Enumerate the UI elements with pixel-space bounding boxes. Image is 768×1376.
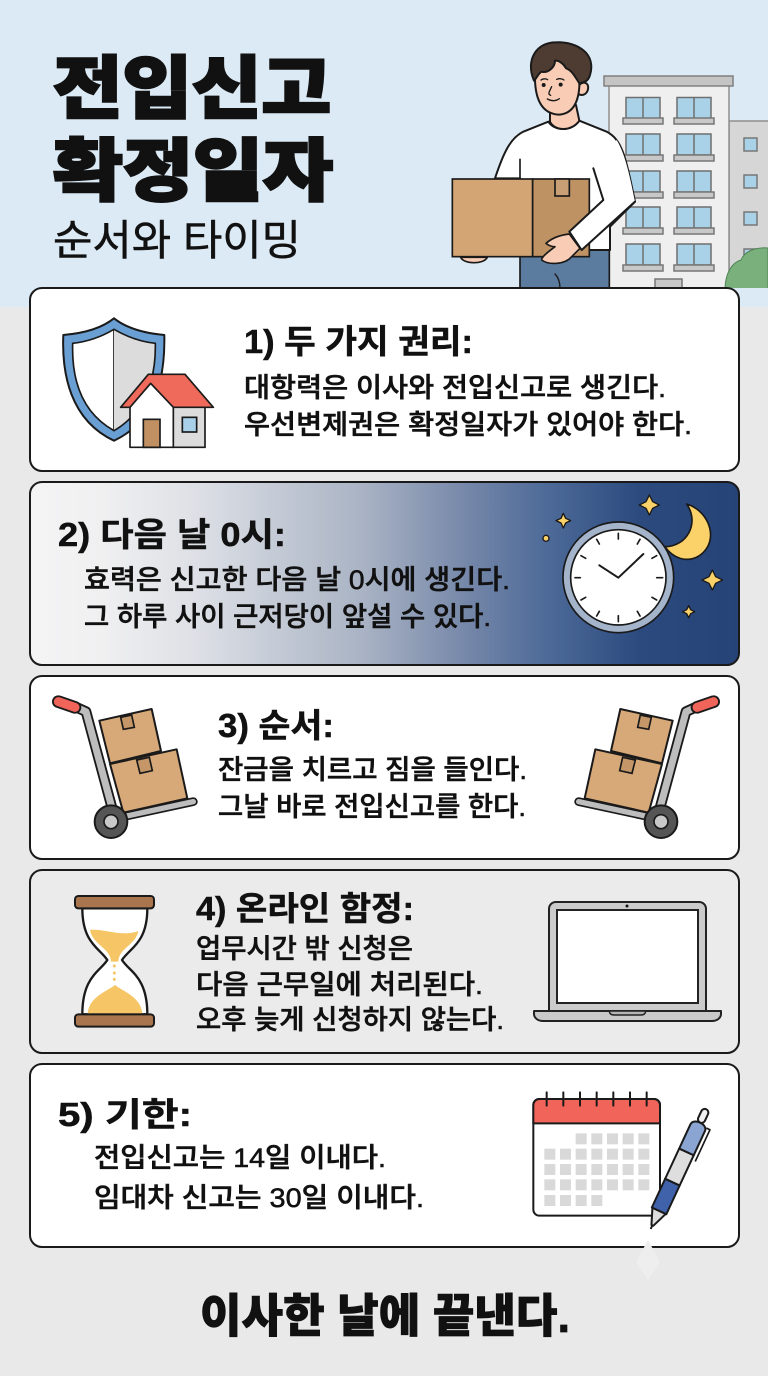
panel 4: online trap	[30, 870, 739, 1053]
body text: 그 하루 사이 근저당이 앞설 수 있다.	[84, 602, 491, 632]
heading: 1) 두 가지 권리:	[244, 323, 473, 360]
body text: 오후 늦게 신청하지 않는다.	[196, 1005, 504, 1035]
icon: clock, moon and stars	[543, 495, 723, 633]
heading: 4) 온라인 함정:	[196, 890, 414, 927]
icon: shield and house	[63, 318, 213, 447]
panel 5: deadline	[30, 1064, 739, 1247]
heading: 2) 다음 날 0시:	[58, 516, 286, 553]
body text	[244, 373, 692, 440]
body text: 업무시간 밖 신청은	[196, 934, 413, 964]
body text: 대항력은 이사와 전입신고로 생긴다.	[244, 373, 666, 403]
title	[53, 52, 333, 210]
illustration: apartment buildings	[452, 42, 768, 294]
bush	[725, 248, 768, 290]
sweater	[495, 121, 635, 250]
body text: 그날 바로 전입신고를 한다.	[218, 792, 526, 822]
body text: 잔금을 치르고 짐을 들인다.	[218, 755, 527, 785]
body text	[94, 1143, 424, 1213]
box	[452, 179, 589, 257]
facial features	[541, 79, 564, 101]
main building	[604, 76, 733, 294]
face	[535, 57, 579, 115]
right sleeve	[569, 140, 635, 250]
body text: 다음 근무일에 처리된다.	[196, 970, 483, 1000]
body text	[218, 755, 527, 822]
page background	[0, 307, 768, 1376]
title: 확정일자	[53, 134, 333, 210]
body text	[196, 934, 504, 1035]
title: 전입신고	[53, 52, 331, 128]
icon: right hand truck	[579, 702, 714, 838]
panel 3: order	[30, 676, 739, 859]
icon: hourglass	[75, 896, 154, 1027]
decorative sparkle	[636, 1240, 660, 1280]
subtitle: 순서와 타이밍	[53, 217, 301, 264]
jeans	[519, 250, 610, 287]
panel 1: two rights	[30, 288, 739, 471]
icon: laptop	[534, 902, 721, 1021]
ear	[578, 83, 588, 95]
heading: 5) 기한:	[58, 1096, 192, 1133]
body text: 효력은 신고한 다음 날 0시에 생긴다.	[84, 565, 510, 595]
body text	[84, 565, 510, 632]
heading: 3) 순서:	[218, 707, 334, 744]
body text: 우선변제권은 확정일자가 있어야 한다.	[244, 410, 692, 440]
icon: calendar and pen	[533, 1092, 717, 1234]
hands	[542, 234, 580, 263]
body text: 전입신고는 14일 이내다.	[94, 1143, 386, 1173]
man carrying a box	[452, 42, 635, 293]
header background	[0, 0, 768, 307]
panel 2: midnight the next day	[30, 482, 739, 665]
side building	[730, 120, 768, 268]
hair	[531, 42, 591, 83]
closing message: 이사한 날에 끝낸다.	[200, 1290, 570, 1342]
body text: 임대차 신고는 30일 이내다.	[94, 1183, 424, 1213]
neck	[550, 105, 579, 129]
icon: left hand truck	[58, 702, 193, 838]
